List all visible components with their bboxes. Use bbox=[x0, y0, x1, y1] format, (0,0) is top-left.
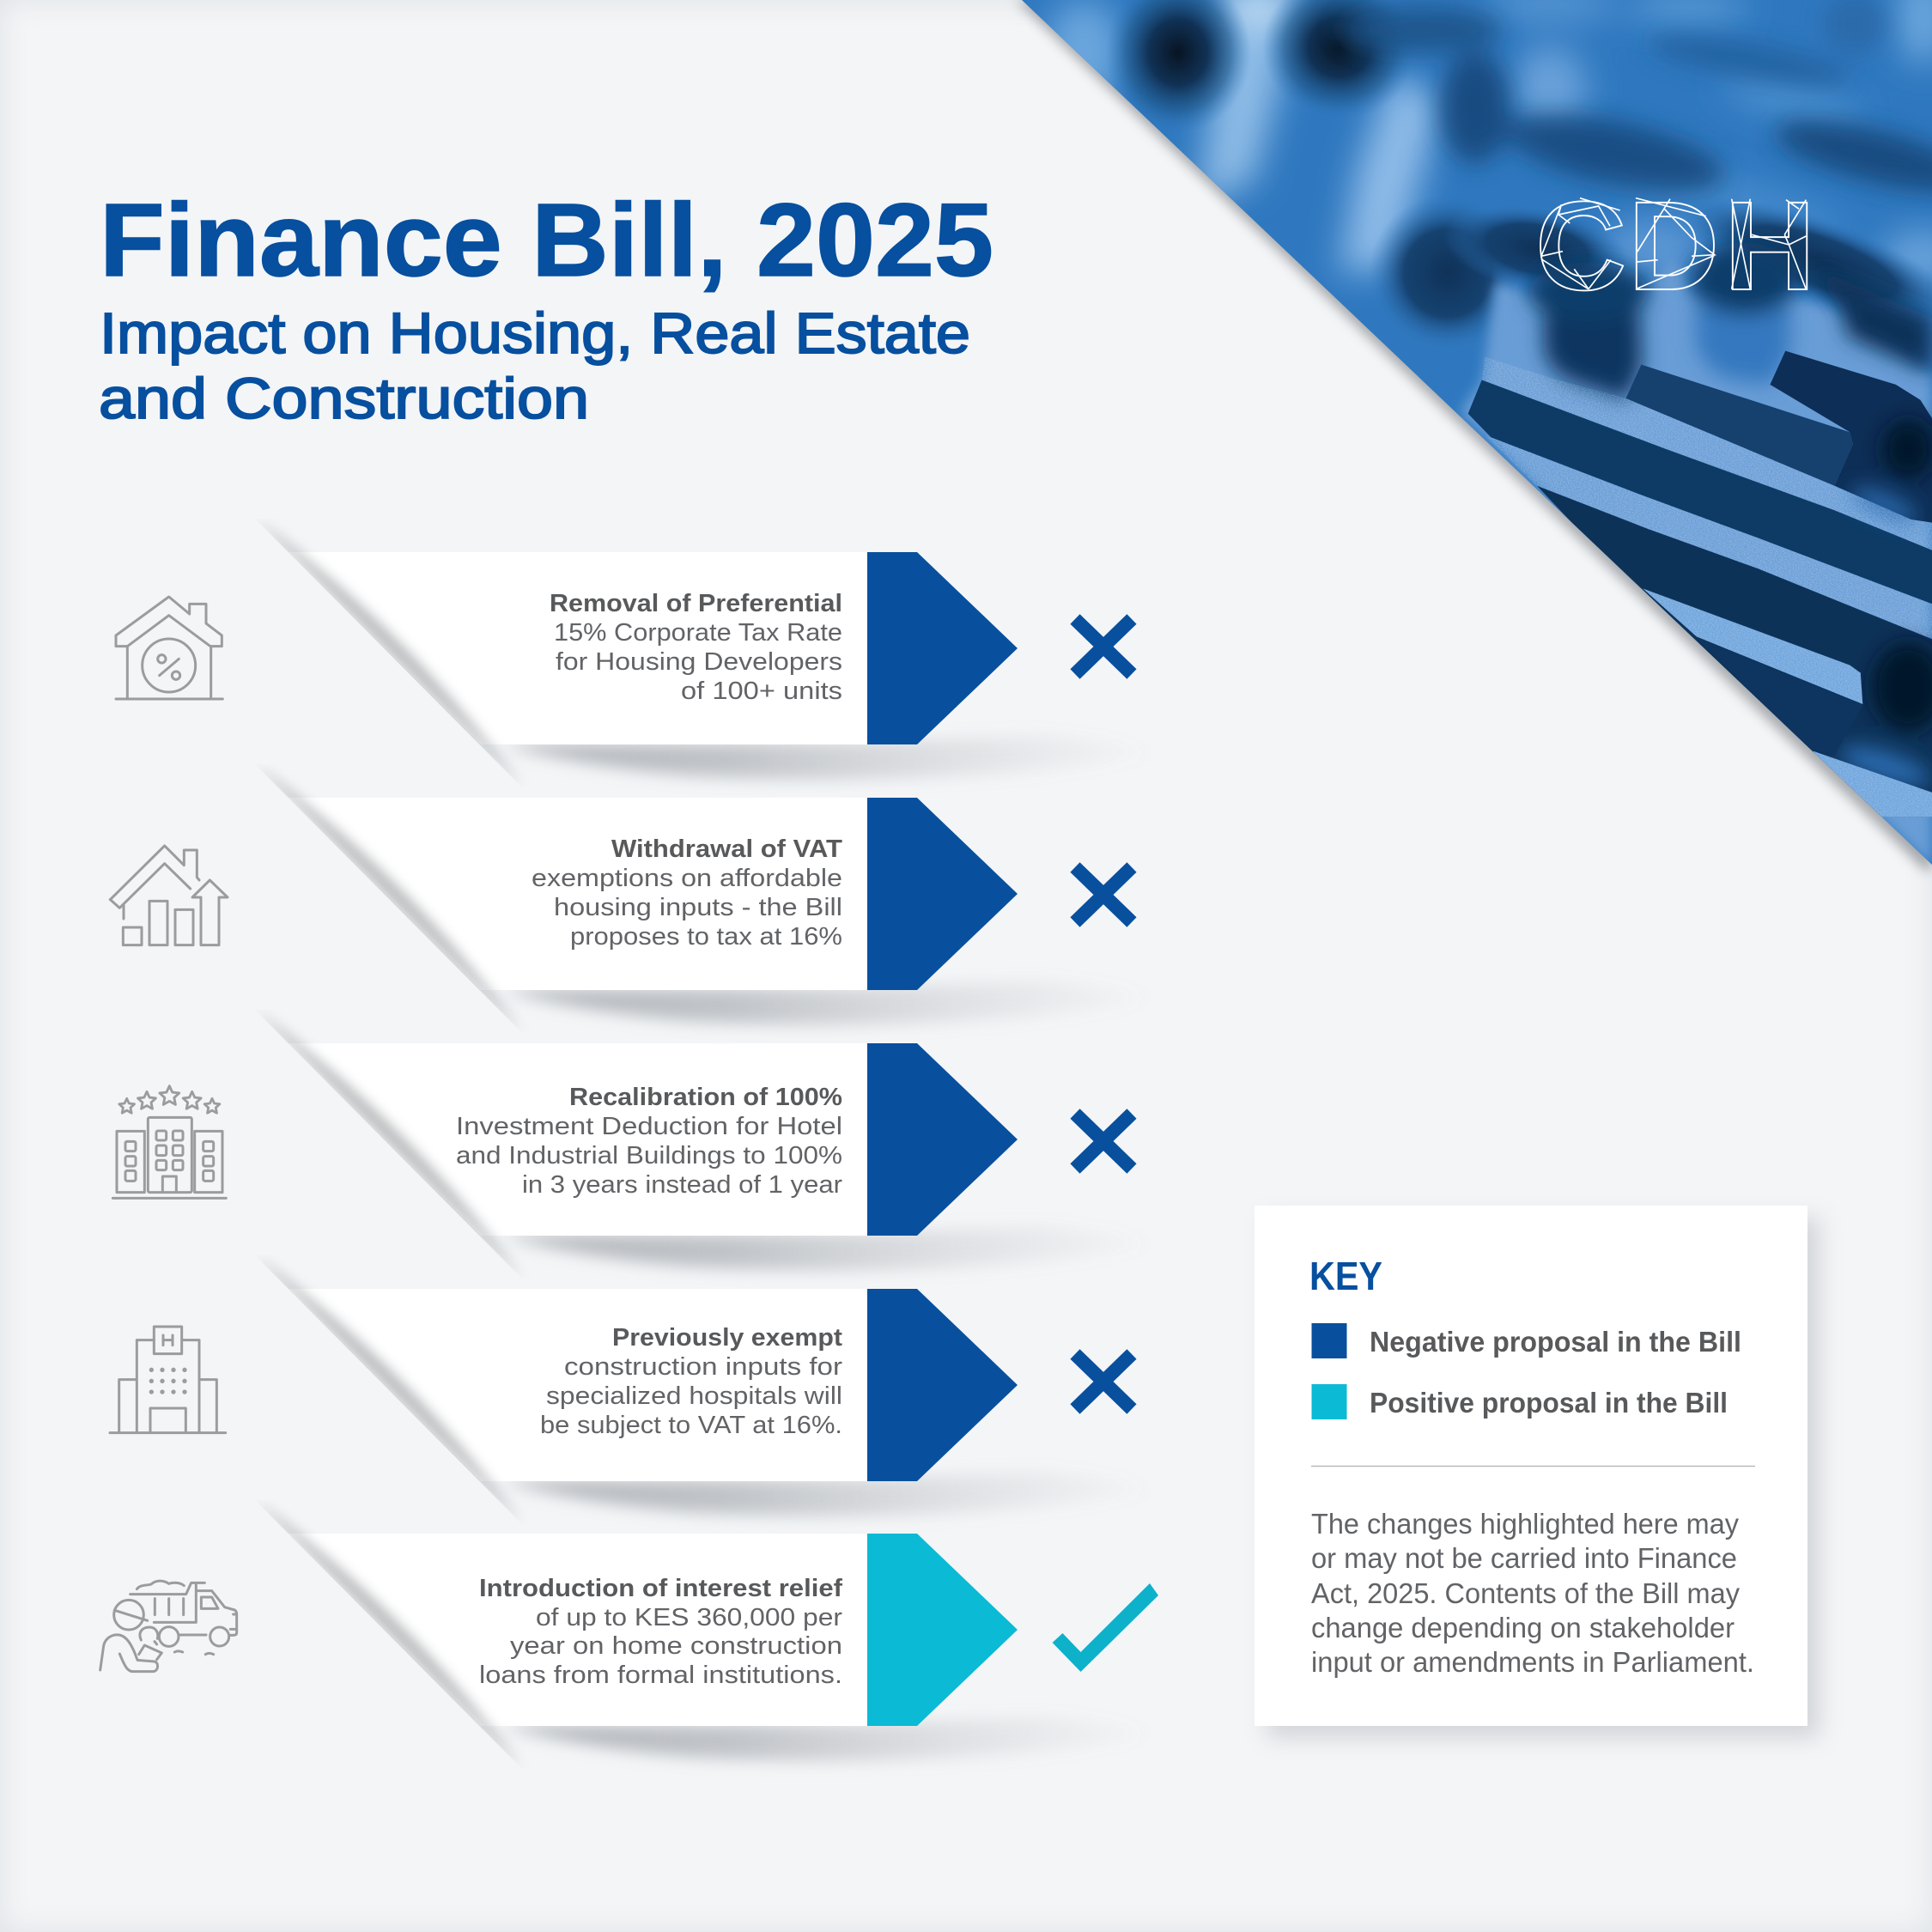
text: item 3: Investment Deduction for Hotel bbox=[456, 1113, 842, 1140]
disclaimer paragraph bbox=[1311, 1508, 1754, 1678]
legend: positive: Positive proposal in the Bill bbox=[1370, 1387, 1728, 1419]
icon: house with percent bbox=[116, 597, 222, 699]
panel shadow bbox=[1267, 1218, 1820, 1738]
text: item 2: housing inputs - the Bill bbox=[554, 894, 842, 921]
soft sloping dark bands bbox=[1340, 0, 1932, 206]
text: item 1: Removal of Preferential bbox=[550, 590, 842, 617]
subtitle: Impact on Housing, Real Estate bbox=[100, 301, 970, 366]
disclaimer paragraph: input or amendments in Parliament. bbox=[1311, 1646, 1754, 1678]
text: item 5: of up to KES 360,000 per bbox=[536, 1604, 842, 1631]
deep shadow and soft blue reflections bbox=[1836, 420, 1932, 793]
band with fold and shadows bbox=[255, 764, 1155, 1033]
text: item 2: Withdrawal of VAT bbox=[611, 835, 842, 863]
disclaimer paragraph: The changes highlighted here may bbox=[1311, 1508, 1739, 1540]
text: item 4: be subject to VAT at 16%. bbox=[540, 1412, 842, 1439]
row 1: preferential corporate tax bbox=[116, 519, 1155, 787]
text: item 1: of 100+ units bbox=[681, 677, 842, 705]
icon: negative cross bbox=[1075, 1114, 1132, 1169]
text: item 1: for Housing Developers bbox=[556, 648, 842, 676]
surface grain bbox=[1482, 357, 1932, 817]
text: item 5: loans from formal institutions. bbox=[479, 1662, 842, 1689]
lit strips in the foreground bbox=[1643, 588, 1932, 817]
lit surface of the maze bbox=[1460, 258, 1932, 867]
subtitle bbox=[99, 301, 970, 431]
disclaimer paragraph: Act, 2025. Contents of the Bill may bbox=[1311, 1577, 1740, 1609]
icon: negative cross bbox=[1075, 1354, 1132, 1409]
diagonal shadow under photo bbox=[1016, 0, 1932, 872]
text: item 1: 15% Corporate Tax Rate bbox=[554, 619, 842, 647]
sharp ridges of the maze bbox=[1468, 351, 1932, 817]
band with fold and shadows bbox=[255, 519, 1155, 787]
band with fold and shadows bbox=[255, 1500, 1155, 1769]
text: item 4: Previously exempt bbox=[612, 1324, 842, 1352]
text: item 4: construction inputs for bbox=[564, 1353, 842, 1381]
text: item 1 bbox=[550, 590, 842, 705]
defocused dark hollows bbox=[1105, 0, 1932, 352]
icon: hotel with five stars bbox=[112, 1086, 226, 1198]
title: Finance Bill, 2025 bbox=[100, 181, 993, 298]
row 4: hospital construction inputs bbox=[110, 1255, 1155, 1524]
legend: negative: Negative proposal in the Bill bbox=[1370, 1326, 1741, 1358]
text: item 2: proposes to tax at 16% bbox=[570, 923, 842, 951]
logo: CDH faceted wordmark: CDH bbox=[1535, 176, 1815, 317]
text: item 2: exemptions on affordable bbox=[532, 865, 842, 892]
icon: worker and dump truck bbox=[100, 1581, 237, 1672]
icon: house with rising bars bbox=[110, 846, 228, 945]
icon: negative cross bbox=[1075, 867, 1132, 922]
row 5: interest relief bbox=[100, 1500, 1158, 1769]
icon: hospital building bbox=[110, 1327, 226, 1433]
text: item 3: in 3 years instead of 1 year bbox=[522, 1171, 842, 1199]
text: item 3: Recalibration of 100% bbox=[569, 1084, 842, 1111]
text: item 5: year on home construction bbox=[510, 1632, 842, 1660]
text: item 4: specialized hospitals will bbox=[546, 1382, 842, 1410]
icon: positive check mark bbox=[1053, 1583, 1158, 1672]
photo: blue blurred maze bbox=[1022, 0, 1932, 867]
subtitle: and Construction bbox=[99, 367, 589, 431]
text: item 3: and Industrial Buildings to 100% bbox=[456, 1142, 842, 1170]
band with fold and shadows bbox=[255, 1255, 1155, 1524]
text: item 2 bbox=[532, 835, 842, 951]
disclaimer paragraph: or may not be carried into Finance bbox=[1311, 1542, 1737, 1574]
key panel bbox=[1255, 1206, 1820, 1738]
panel background bbox=[1255, 1206, 1807, 1726]
band with fold and shadows bbox=[255, 1010, 1155, 1279]
key heading: KEY bbox=[1309, 1254, 1382, 1298]
logo: CDH faceted wordmark bbox=[1540, 197, 1808, 292]
text: item 3 bbox=[456, 1084, 842, 1199]
row 2: VAT exemptions withdrawn bbox=[110, 764, 1155, 1033]
text: item 5 bbox=[479, 1575, 842, 1689]
disclaimer paragraph: change depending on stakeholder bbox=[1311, 1612, 1735, 1643]
text: item 5: Introduction of interest relief bbox=[479, 1575, 842, 1602]
row 3: investment deduction recalibration bbox=[112, 1010, 1155, 1279]
text: item 4 bbox=[540, 1324, 842, 1439]
icon: negative cross bbox=[1075, 619, 1132, 674]
